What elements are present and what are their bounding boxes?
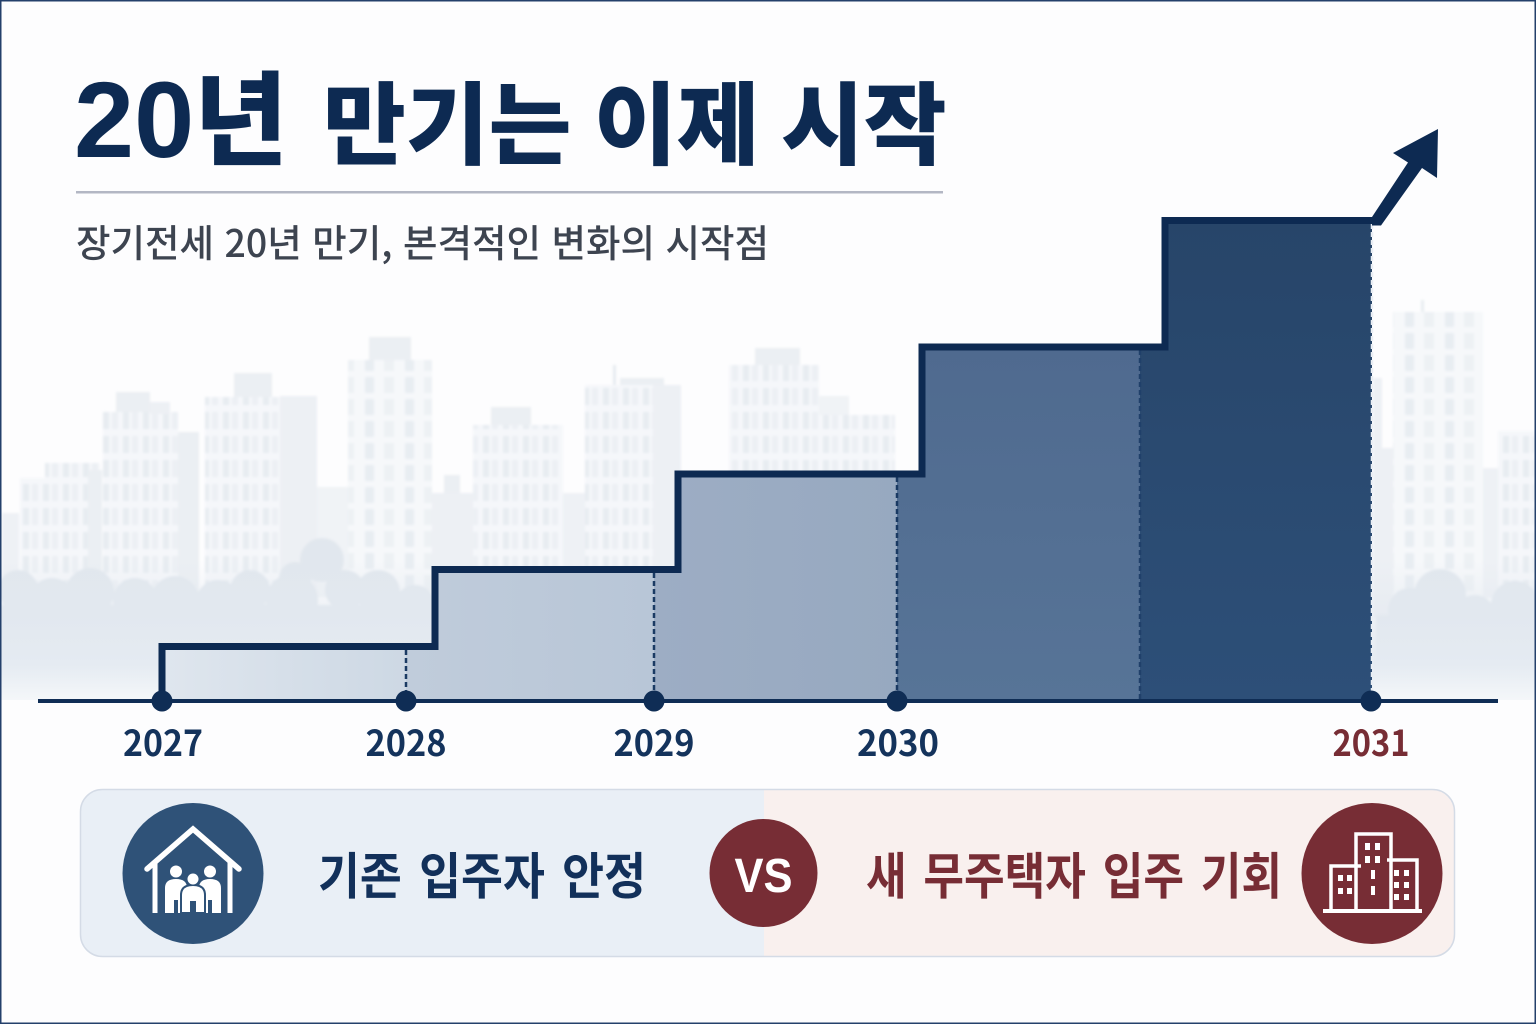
- comparison panel: [80, 789, 1455, 957]
- vs badge: [710, 819, 818, 927]
- icon: family in house: [122, 803, 264, 944]
- dashed year guides: [406, 224, 1372, 700]
- title: 시작: [781, 53, 947, 183]
- step fill 2028-2029: [406, 570, 654, 700]
- timeline markers: [152, 690, 1382, 712]
- year labels: 2027: [123, 715, 203, 767]
- title divider: [76, 191, 943, 194]
- icon: apartment buildings: [1302, 803, 1442, 944]
- step fill 2027-2028: [162, 648, 406, 700]
- panel outline: [80, 790, 1454, 956]
- right label: 새 무주택자 입주 기회: [866, 837, 1282, 909]
- panel background split: [80, 789, 1455, 957]
- title: 년: [194, 40, 288, 187]
- year labels: [123, 715, 1410, 767]
- growth arrow: [1372, 129, 1438, 226]
- timeline axis: [38, 699, 1498, 703]
- title: 만기는: [323, 53, 571, 183]
- step fill 2030-2031: [897, 347, 1140, 700]
- year labels: 2028: [366, 715, 446, 767]
- skyline ground haze: [0, 560, 1536, 700]
- vs badge: VS: [734, 850, 792, 903]
- step fill 2029-2030: [654, 474, 897, 700]
- subtitle: 장기전세 20년 만기, 본격적인 변화의 시작점: [76, 213, 769, 268]
- year labels: 2030: [857, 715, 939, 767]
- step fill 2031: [1140, 221, 1372, 700]
- left label: 기존 입주자 안정: [318, 837, 646, 909]
- year labels: 2029: [614, 715, 694, 767]
- year labels: 2031: [1332, 715, 1410, 767]
- title: 이제: [594, 53, 760, 183]
- stepped chart: [38, 129, 1498, 712]
- title: 20: [74, 59, 194, 180]
- background skyline: [0, 300, 1536, 675]
- rising step line: [162, 220, 1376, 700]
